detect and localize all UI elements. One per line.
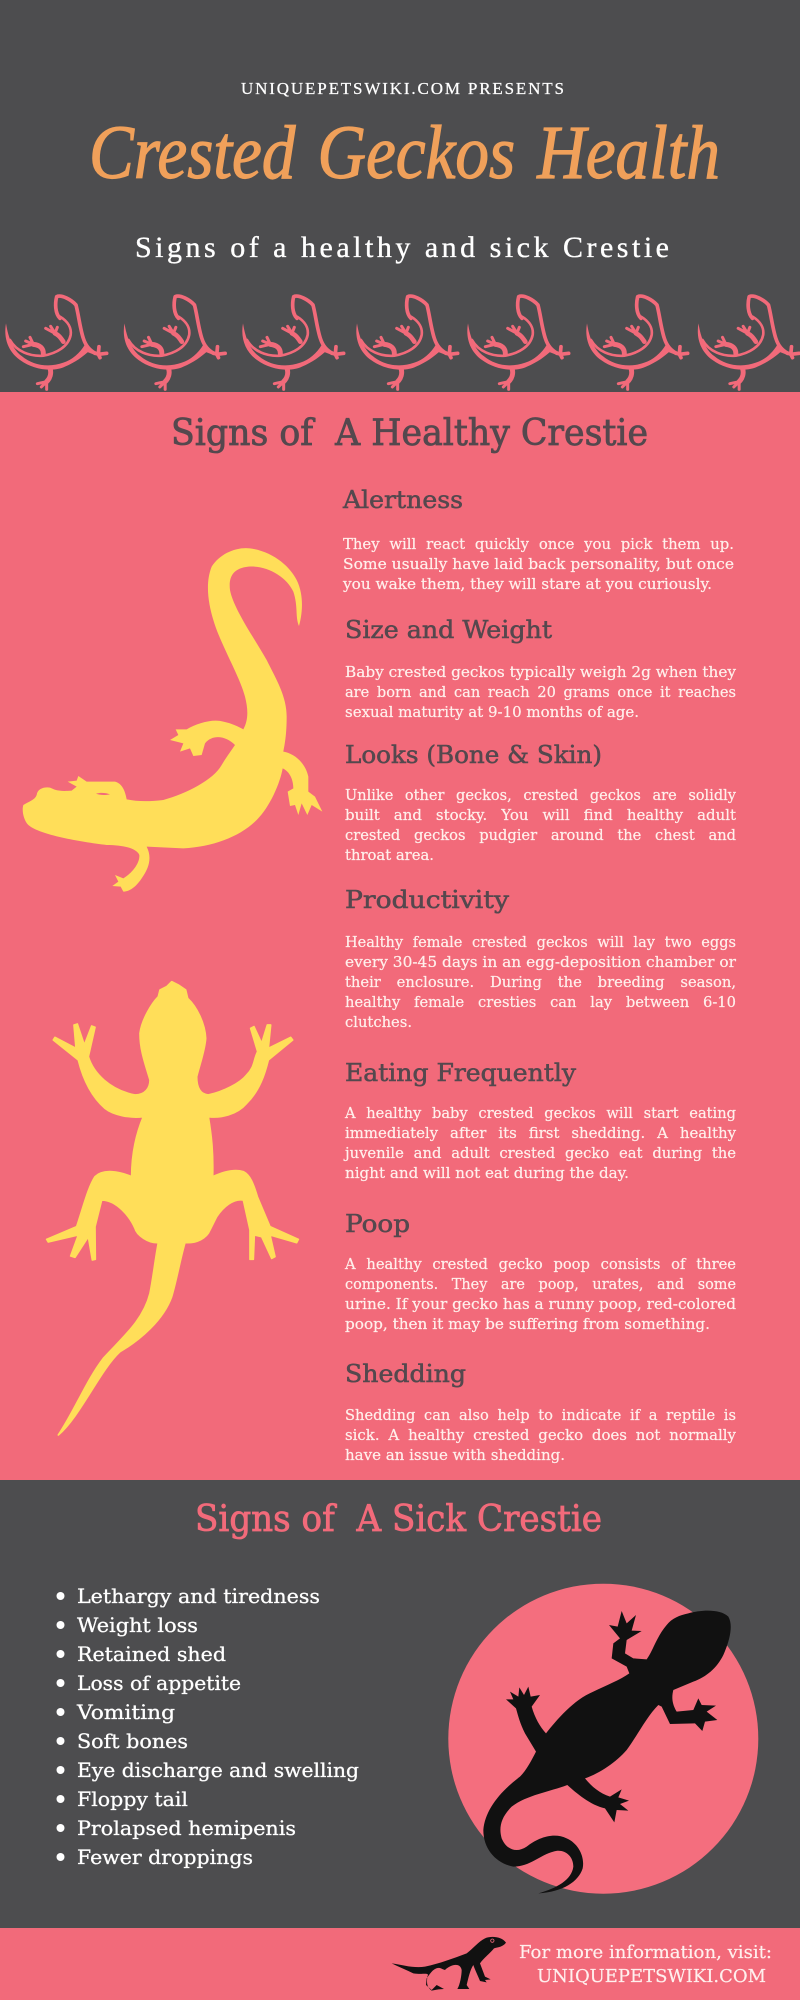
block: eating frequently: immediately after its first shedding. A healthy <box>345 1126 737 1142</box>
block: shedding: Shedding can also help to indicate if a reptile is <box>345 1408 736 1424</box>
block: poop: components. They are poop, urates, and some <box>345 1277 736 1293</box>
block: size and weight: sexual maturity at 9-10 months of age. <box>345 705 639 721</box>
symptom list: Eye discharge and swelling <box>77 1758 359 1782</box>
block: alertness: They will react quickly once you pick them up. <box>343 537 734 553</box>
symptom list: Prolapsed hemipenis <box>77 1816 296 1840</box>
block: alertness <box>342 486 734 593</box>
block: shedding: have an issue with shedding. <box>345 1448 565 1464</box>
block: eating frequently <box>343 1059 737 1182</box>
block: poop <box>344 1210 736 1333</box>
block: alertness: Alertness <box>342 486 463 514</box>
block: poop: urine. If your gecko has a runny poop, red-colored <box>345 1297 736 1313</box>
block: productivity: Productivity <box>345 886 509 914</box>
block: shedding <box>345 1360 737 1464</box>
block: eating frequently: juvenile and adult crested gecko eat during the <box>343 1146 736 1162</box>
block: looks <box>345 741 737 864</box>
block: poop: Poop <box>345 1210 410 1238</box>
block: alertness: you wake them, they will stare at you curiously. <box>342 577 712 593</box>
panel: header <box>0 0 800 392</box>
icon: yellow gecko curled <box>23 548 322 892</box>
block: size and weight: are born and can reach 20 grams once it reaches <box>345 685 736 701</box>
block: looks: crested geckos pudgier around the chest and <box>345 828 736 844</box>
block: eating frequently: Eating Frequently <box>345 1059 576 1087</box>
symptom list: Weight loss <box>77 1613 198 1637</box>
block: productivity: every 30-45 days in an egg-deposition chamber or <box>345 955 736 971</box>
block: productivity: Healthy female crested geckos will lay two eggs <box>345 935 736 951</box>
block: eating frequently: A healthy baby crested geckos will start eating <box>344 1106 736 1122</box>
block: productivity: clutches. <box>345 1015 412 1031</box>
block: looks: built and stocky. You will find healthy adult <box>345 808 736 824</box>
footer text <box>519 1942 772 1987</box>
block: shedding: Shedding <box>345 1360 466 1388</box>
symptom list: Floppy tail <box>77 1787 188 1811</box>
block: looks: Unlike other geckos, crested geckos are solidly <box>345 788 737 804</box>
block: productivity: healthy female cresties can lay between 6-10 <box>345 995 736 1011</box>
icon: yellow gecko top view <box>47 982 298 1435</box>
heading: healthy: Signs of A Healthy Crestie <box>171 413 648 454</box>
symptom list: Fewer droppings <box>77 1845 253 1869</box>
block: size and weight: Size and Weight <box>345 616 552 644</box>
symptom list: Soft bones <box>77 1729 188 1753</box>
symptom list <box>56 1584 359 1869</box>
symptom list: Lethargy and tiredness <box>77 1584 320 1608</box>
presenter line: UNIQUEPETSWIKI.COM PRESENTS <box>241 79 564 98</box>
block: looks: Looks (Bone & Skin) <box>345 741 602 769</box>
icon: black gecko on pink circle <box>448 1584 758 1894</box>
block: productivity <box>345 886 736 1031</box>
heading: sick: Signs of A Sick Crestie <box>195 1499 602 1540</box>
footer text: UNIQUEPETSWIKI.COM <box>537 1966 766 1987</box>
block: size and weight <box>345 616 737 721</box>
panel: sick signs <box>0 1480 800 1928</box>
symptom list: Vomiting <box>76 1700 175 1724</box>
block: alertness: Some usually have laid back personality, but once <box>343 557 734 573</box>
block: size and weight: Baby crested geckos typically weigh 2g when they <box>345 665 737 681</box>
block: looks: throat area. <box>345 848 434 864</box>
icon: footer gecko <box>392 1937 506 1991</box>
block: poop: poop, then it may be suffering from something. <box>345 1317 710 1333</box>
footer text: For more information, visit: <box>519 1942 772 1963</box>
panel: healthy signs <box>0 392 800 1480</box>
block: shedding: sick. A healthy crested gecko does not normally <box>345 1428 737 1444</box>
panel: footer <box>0 1928 800 2000</box>
subtitle: Signs of a healthy and sick Crestie <box>135 231 669 264</box>
symptom list: Retained shed <box>77 1642 226 1666</box>
block: eating frequently: night and will not eat during the day. <box>345 1166 629 1182</box>
block: productivity: their enclosure. During the breeding season, <box>345 975 736 991</box>
block: poop: A healthy crested gecko poop consists of three <box>344 1257 736 1273</box>
icon row: pink geckos <box>5 296 799 389</box>
symptom list: Loss of appetite <box>77 1671 241 1695</box>
title: Crested Geckos Health <box>89 111 720 195</box>
